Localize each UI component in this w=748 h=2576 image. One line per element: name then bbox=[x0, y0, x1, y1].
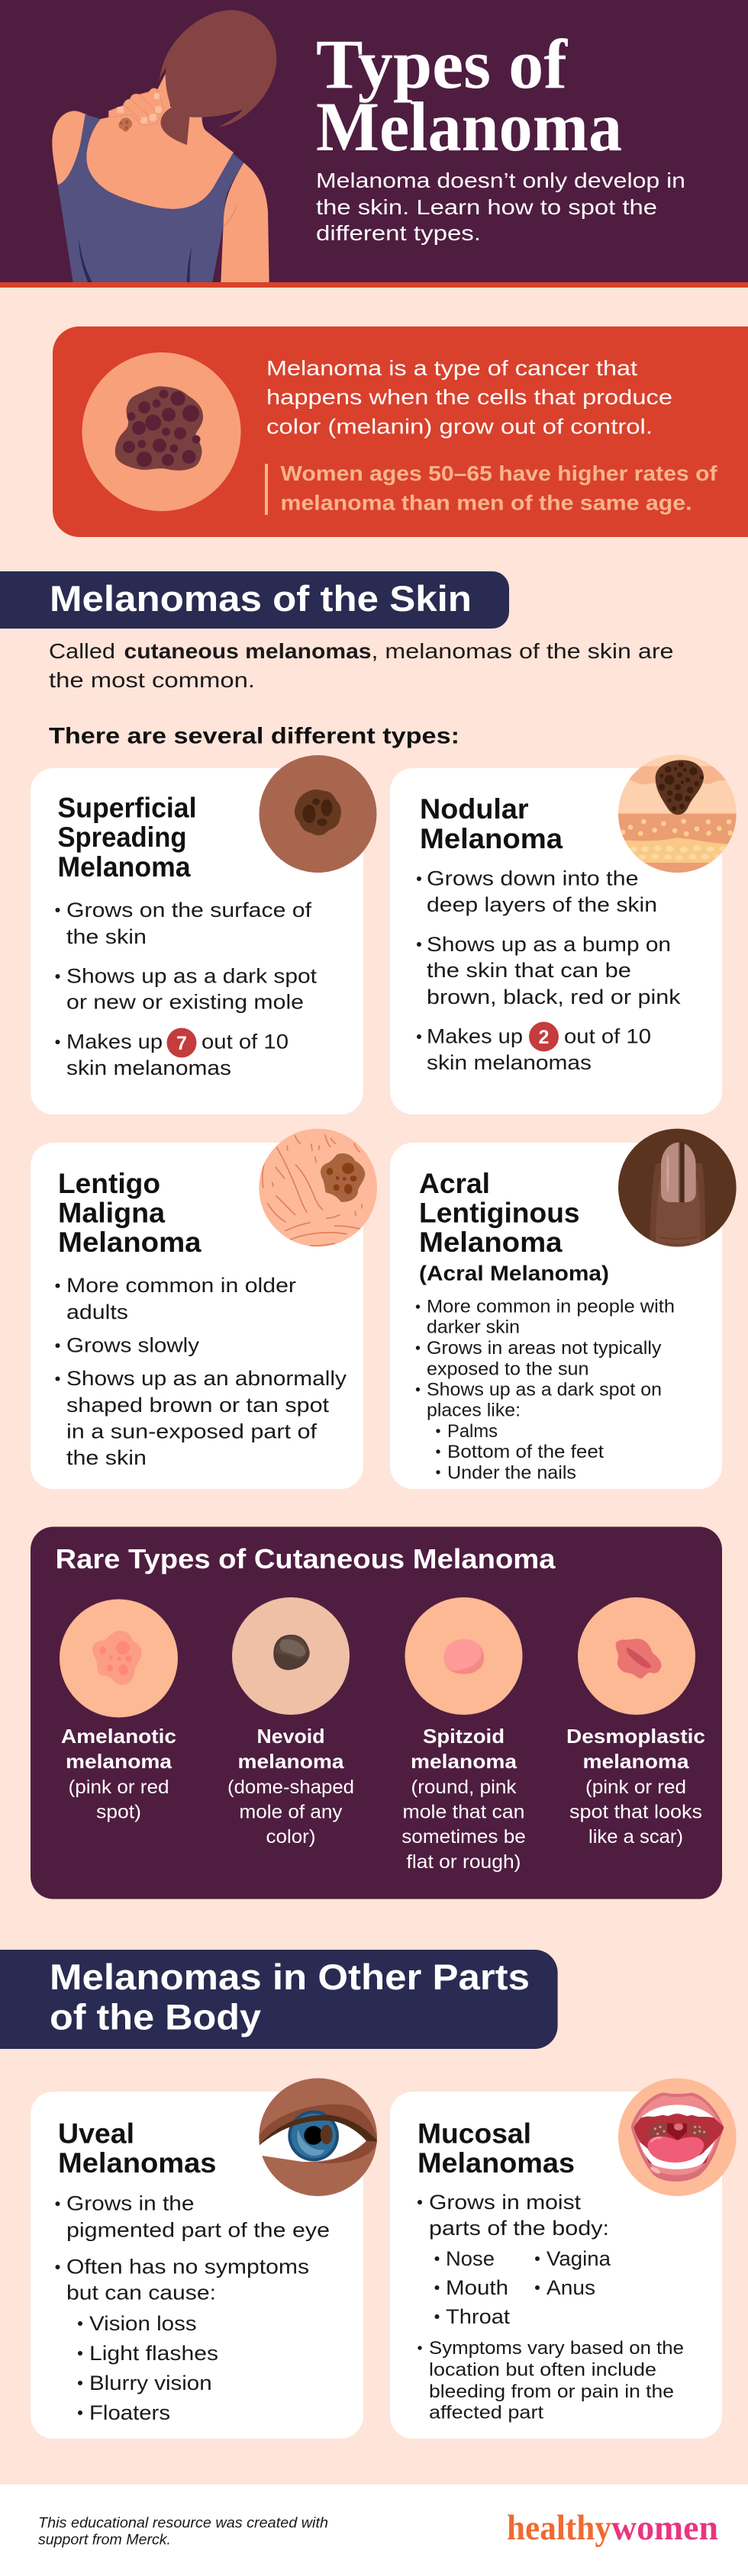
heading: Mucosal bbox=[418, 2118, 531, 2150]
bullet list bbox=[418, 2191, 684, 2423]
bullet list bbox=[55, 1274, 347, 1469]
bullet list: Grows in areas not typically bbox=[427, 1338, 661, 1359]
heading: Maligna bbox=[58, 1198, 165, 1229]
icon: eye bbox=[259, 2078, 377, 2196]
icon: nodular skin layers bbox=[618, 754, 737, 873]
bullet list: Grows in the bbox=[66, 2192, 194, 2215]
card: mucosal melanomas bbox=[390, 2078, 737, 2439]
bullet list: darker skin bbox=[427, 1317, 520, 1338]
bullet list: Grows down into the bbox=[427, 867, 638, 890]
heading bbox=[58, 2118, 217, 2179]
heading: Lentigo bbox=[58, 1168, 160, 1199]
card: lentigo maligna melanoma bbox=[31, 1125, 384, 1489]
bullet list bbox=[417, 867, 681, 1074]
bullet list: Anus bbox=[546, 2276, 595, 2299]
bullet list: Nose bbox=[446, 2247, 495, 2270]
bullet list: affected part bbox=[429, 2403, 543, 2423]
heading: Acral bbox=[419, 1168, 490, 1199]
intro text: cutaneous melanomas bbox=[124, 639, 371, 663]
heading: Superficial bbox=[58, 792, 197, 823]
section heading: melanomas of the skin: Melanomas of the Skin bbox=[50, 578, 472, 619]
bullet list: places like: bbox=[427, 1401, 521, 1421]
panel: what is melanoma bbox=[53, 326, 748, 537]
heading bbox=[418, 2118, 575, 2179]
bullet list: Throat bbox=[446, 2305, 511, 2328]
icon: superficial mole bbox=[260, 755, 377, 873]
bullet list: adults bbox=[66, 1301, 128, 1323]
heading: Melanoma bbox=[420, 823, 563, 854]
bullet list: deep layers of the skin bbox=[427, 893, 657, 916]
icon: melanoma mole bbox=[82, 352, 241, 511]
bullet list: More common in people with bbox=[427, 1297, 675, 1317]
desmoplastic melanoma: melanoma bbox=[583, 1750, 689, 1773]
heading: Melanoma bbox=[419, 1227, 563, 1258]
bullet list: Shows up as a dark spot on bbox=[427, 1379, 662, 1400]
icon: wrinkled skin with mole bbox=[259, 1129, 377, 1246]
callout: women ages 50-65: melanoma than men of the same age. bbox=[281, 491, 692, 514]
icon: fingernail with dark stripe bbox=[618, 1129, 737, 1246]
heading: Uveal bbox=[58, 2118, 134, 2150]
bullet list: Floaters bbox=[89, 2401, 170, 2424]
bullet list: bleeding from or pain in the bbox=[429, 2381, 674, 2402]
bullet list: the skin that can be bbox=[427, 959, 631, 982]
footer bbox=[0, 2484, 748, 2576]
heading bbox=[58, 1168, 202, 1258]
bullet list: 7 bbox=[176, 1033, 187, 1054]
section heading: other parts of the body bbox=[0, 1950, 558, 2049]
heading: Nodular bbox=[420, 793, 528, 825]
bullet list: Grows slowly bbox=[66, 1333, 200, 1356]
amelanotic melanoma: Amelanotic bbox=[61, 1725, 176, 1748]
spitzoid melanoma bbox=[401, 1597, 526, 1873]
callout: women ages 50-65: Women ages 50–65 have higher rates of bbox=[281, 461, 717, 485]
bullet list bbox=[55, 2192, 330, 2424]
amelanotic melanoma bbox=[60, 1599, 178, 1823]
nevoid melanoma bbox=[227, 1597, 354, 1848]
sponsor note bbox=[38, 2516, 328, 2548]
bullet list: Light flashes bbox=[89, 2342, 218, 2365]
bullet list: parts of the body: bbox=[429, 2217, 609, 2240]
bullet list: Shows up as an abnormally bbox=[66, 1367, 347, 1390]
heading: Melanoma bbox=[58, 1227, 202, 1258]
iris bbox=[288, 2111, 339, 2161]
heading: Melanomas bbox=[418, 2147, 575, 2179]
spitzoid melanoma: Spitzoid bbox=[423, 1725, 505, 1748]
bullet list: Blurry vision bbox=[89, 2372, 212, 2394]
definition text bbox=[266, 356, 672, 438]
amelanotic melanoma: (pink or red bbox=[69, 1777, 169, 1798]
bullet list: Palms bbox=[447, 1421, 498, 1442]
sponsor note: support from Merck. bbox=[38, 2533, 171, 2548]
section heading: melanomas of the skin bbox=[0, 571, 509, 629]
spitzoid melanoma: (round, pink bbox=[411, 1777, 517, 1798]
spitzoid melanoma: melanoma bbox=[411, 1750, 517, 1773]
amelanotic melanoma: melanoma bbox=[66, 1750, 172, 1773]
bullet list bbox=[416, 1297, 675, 1483]
logo: healthywomen: women bbox=[611, 2508, 718, 2548]
heading: Spreading bbox=[58, 822, 186, 853]
sponsor note: This educational resource was created with bbox=[38, 2516, 328, 2532]
section heading: other parts of the body: of the Body bbox=[50, 1997, 261, 2037]
heading: Melanomas bbox=[58, 2147, 217, 2179]
bullet list: skin melanomas bbox=[427, 1051, 592, 1074]
bullet list: exposed to the sun bbox=[427, 1359, 589, 1379]
panel heading: Rare Types of Cutaneous Melanoma bbox=[55, 1543, 556, 1574]
nevoid melanoma: color) bbox=[266, 1826, 316, 1848]
nevoid melanoma: (dome-shaped bbox=[227, 1777, 354, 1798]
title: Types of bbox=[316, 25, 568, 103]
desmoplastic melanoma: spot that looks bbox=[569, 1802, 702, 1823]
bullet list: Vagina bbox=[546, 2247, 611, 2270]
desmoplastic melanoma: (pink or red bbox=[585, 1777, 686, 1798]
bullet list: the skin bbox=[66, 925, 147, 948]
illustration: woman touching mole on her back bbox=[52, 10, 276, 282]
bullet list: Bottom of the feet bbox=[447, 1442, 604, 1462]
subtitle bbox=[316, 169, 685, 245]
title bbox=[316, 25, 622, 166]
card: acral lentiginous melanoma bbox=[390, 1125, 743, 1489]
bullet list: Under the nails bbox=[447, 1462, 576, 1483]
subtitle: Melanoma doesn’t only develop in bbox=[316, 169, 685, 192]
title: Melanoma bbox=[316, 88, 622, 166]
card: uveal melanomas bbox=[31, 2075, 384, 2439]
heading bbox=[419, 1168, 609, 1285]
logo: healthywomen: healthy bbox=[507, 2508, 611, 2548]
bullet list: Makes up bbox=[66, 1030, 163, 1053]
bullet list: brown, black, red or pink bbox=[427, 986, 681, 1008]
panel: rare types of cutaneous melanoma bbox=[31, 1527, 722, 1899]
bullet list: More common in older bbox=[66, 1274, 296, 1297]
heading: Lentiginous bbox=[419, 1198, 580, 1229]
spitzoid melanoma: sometimes be bbox=[401, 1826, 526, 1848]
bullet list: out of 10 bbox=[564, 1025, 651, 1048]
heading: Melanoma bbox=[58, 851, 191, 883]
bullet list: location but often include bbox=[429, 2360, 656, 2380]
spitzoid melanoma: flat or rough) bbox=[406, 1851, 521, 1873]
bullet list: but can cause: bbox=[66, 2282, 216, 2304]
subtitle: the skin. Learn how to spot the bbox=[316, 195, 657, 219]
bullet list: Shows up as a dark spot bbox=[66, 965, 318, 988]
bullet list: Makes up bbox=[427, 1025, 523, 1048]
amelanotic melanoma: spot) bbox=[96, 1802, 141, 1823]
bullet list: Symptoms vary based on the bbox=[429, 2338, 684, 2359]
nevoid melanoma: Nevoid bbox=[256, 1725, 325, 1748]
nevoid melanoma: mole of any bbox=[240, 1802, 343, 1823]
callout: women ages 50-65 bbox=[265, 461, 717, 515]
bullet list: Grows in moist bbox=[429, 2191, 582, 2214]
intro text: Called bbox=[49, 639, 115, 663]
bullet list: 2 bbox=[539, 1027, 549, 1048]
subheading: several types: There are several different types: bbox=[49, 723, 459, 749]
desmoplastic melanoma bbox=[566, 1597, 705, 1848]
bullet list: out of 10 bbox=[202, 1030, 289, 1053]
header banner bbox=[0, 0, 748, 288]
desmoplastic melanoma: Desmoplastic bbox=[566, 1725, 705, 1748]
icon: open mouth bbox=[618, 2078, 737, 2196]
desmoplastic melanoma: like a scar) bbox=[588, 1826, 683, 1848]
definition text: happens when the cells that produce bbox=[266, 385, 672, 409]
logo: healthywomen bbox=[507, 2508, 718, 2548]
small mole on shoulder bbox=[118, 117, 132, 131]
intro text bbox=[49, 639, 673, 692]
heading bbox=[58, 792, 197, 883]
heading bbox=[420, 793, 563, 854]
section heading: other parts of the body: Melanomas in Other Parts bbox=[50, 1957, 530, 1997]
hair bbox=[160, 10, 276, 145]
spitzoid melanoma: mole that can bbox=[403, 1802, 525, 1823]
intro text: the most common. bbox=[49, 668, 255, 692]
bullet list: Vision loss bbox=[89, 2312, 197, 2335]
bullet list: Shows up as a bump on bbox=[427, 933, 671, 956]
bullet list: the skin bbox=[66, 1446, 147, 1469]
bullet list: Mouth bbox=[446, 2276, 508, 2299]
heading: (Acral Melanoma) bbox=[419, 1261, 609, 1285]
hand bbox=[109, 88, 163, 125]
definition text: Melanoma is a type of cancer that bbox=[266, 356, 637, 380]
subtitle: different types. bbox=[316, 221, 481, 245]
bullet list bbox=[55, 899, 318, 1079]
bullet list: shaped brown or tan spot bbox=[66, 1394, 330, 1417]
bullet list: pigmented part of the eye bbox=[66, 2218, 330, 2241]
nevoid melanoma: melanoma bbox=[238, 1750, 344, 1773]
bullet list: Grows on the surface of bbox=[66, 899, 312, 921]
intro text: , melanomas of the skin are bbox=[371, 639, 673, 663]
bullet list: Often has no symptoms bbox=[66, 2255, 309, 2278]
card: superficial spreading melanoma bbox=[31, 755, 377, 1114]
bullet list: in a sun-exposed part of bbox=[66, 1420, 318, 1443]
bullet list: or new or existing mole bbox=[66, 990, 304, 1013]
bullet list: skin melanomas bbox=[66, 1056, 231, 1079]
card: nodular melanoma bbox=[390, 751, 748, 1114]
definition text: color (melanin) grow out of control. bbox=[266, 415, 653, 438]
